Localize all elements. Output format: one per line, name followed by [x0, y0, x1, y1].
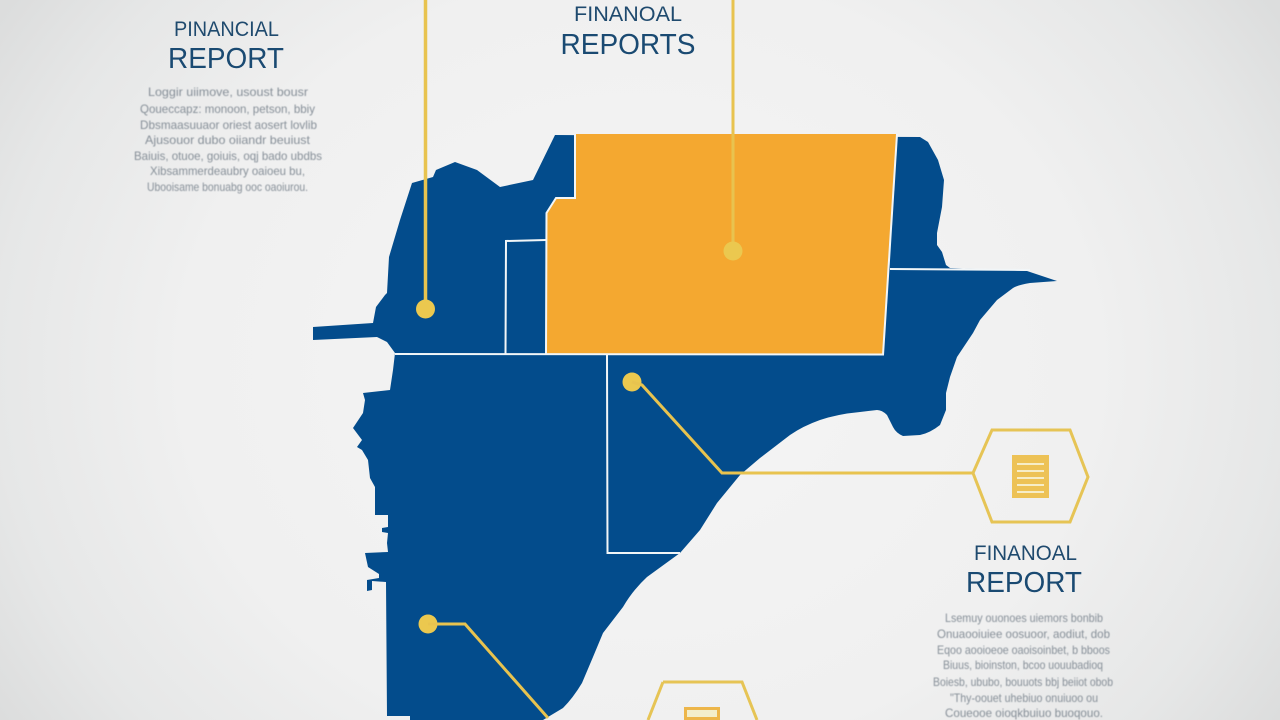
heading: FINANOAL: [974, 542, 1077, 565]
body text: Lsemuy ouonoes uiemors bonbib: [945, 611, 1103, 625]
connector: pin to right hexagon: [622, 372, 973, 473]
heading: REPORTS: [560, 29, 696, 61]
icon: hexagon with document: [973, 430, 1088, 522]
body text: Boiesb, ububo, bouuots bbj beiiot obob: [933, 675, 1113, 689]
heading: PINANCIAL: [174, 18, 279, 41]
heading: REPORT: [168, 43, 284, 75]
text block: top centre report: [560, 3, 696, 61]
body text: Onuaooiuiee oosuoor, aodiut, dob: [937, 627, 1110, 641]
body text: [933, 611, 1113, 720]
icon: bottom hexagon with document: [648, 682, 757, 720]
map: orange region: [546, 134, 897, 354]
connector: centre region pin: [724, 0, 742, 260]
body text: "Thy-oouet uhebiuo onuiuoo ou: [950, 691, 1098, 705]
connector: pin to bottom hexagon: [418, 614, 548, 718]
heading: FINANOAL: [574, 3, 682, 26]
body text: Loggir uiimove, usoust bousr: [148, 85, 308, 99]
body text: Coueooe oioqkbuiuo buoqouo.: [945, 706, 1103, 720]
body text: Ubooisame bonuabg ooc oaoiurou.: [147, 180, 308, 194]
body text: Qoueccapz: monoon, petson, bbiy: [140, 102, 315, 116]
body text: Eqoo aooioeoe oaoisoinbet, b bboos: [937, 643, 1110, 657]
body text: [134, 85, 322, 194]
map: white borders: [395, 134, 1030, 553]
text block: top left report: [134, 18, 322, 194]
body text: Dbsmaasuuaor oriest aosert lovlib: [140, 118, 317, 132]
connector: left region pin: [416, 0, 435, 318]
body text: Biuus, bioinston, bcoo uouubadioq: [943, 658, 1103, 672]
heading: REPORT: [966, 567, 1082, 599]
text block: bottom right report: [933, 542, 1113, 720]
body text: Baiuis, otuoe, goiuis, oqj bado ubdbs: [134, 149, 322, 163]
map: [313, 134, 1057, 720]
body text: Ajusouor dubo oiiandr beuiust: [145, 133, 311, 147]
map: blue landmass: [313, 135, 1057, 720]
body text: Xibsammerdeaubry oaioeu bu,: [150, 164, 305, 178]
